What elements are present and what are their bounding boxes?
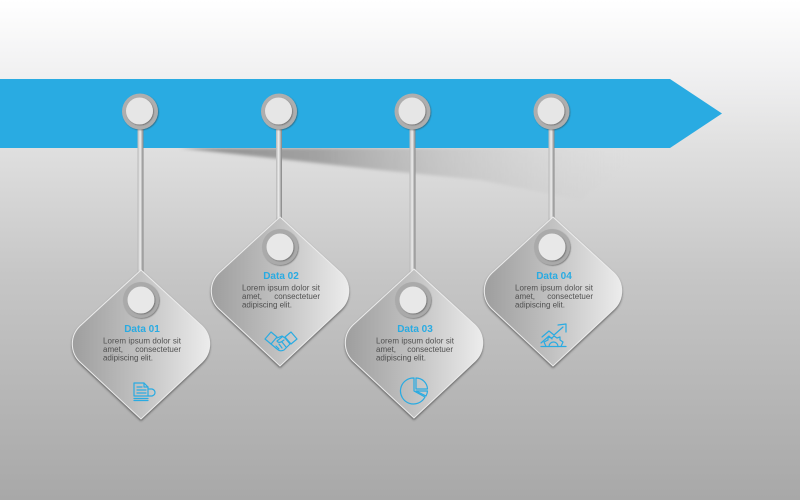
card 4 text	[515, 284, 594, 310]
panel: Data 04	[484, 217, 622, 366]
card 4 text: amet,	[515, 292, 535, 301]
card 2 text: Lorem ipsum dolor sit	[242, 284, 321, 292]
card 2 heading: Data 02	[263, 271, 299, 282]
card 3 ring	[395, 282, 431, 318]
timeline pin 1	[122, 94, 158, 130]
card 4 heading: Data 04	[536, 271, 572, 282]
card 3 text: adipiscing elit.	[376, 354, 426, 362]
icon: handshake	[265, 332, 297, 351]
icon: pie chart	[400, 378, 428, 404]
pole 1	[138, 125, 144, 290]
arrow shadow	[180, 148, 650, 200]
pole 3	[410, 125, 416, 290]
card 1 text: amet,	[103, 345, 123, 354]
card 3 heading: Data 03	[397, 324, 433, 335]
card 1 heading: Data 01	[124, 324, 160, 335]
card 4 text: consectetuer	[547, 292, 593, 301]
card 2 text: consectetuer	[274, 292, 320, 301]
card 1 ring	[123, 282, 159, 318]
card 3 text: Lorem ipsum dolor sit	[376, 336, 455, 346]
panel: Data 03	[345, 269, 483, 418]
timeline pin 2	[261, 94, 297, 130]
card 4 text: adipiscing elit.	[515, 300, 565, 310]
card 3 text: amet,	[376, 345, 396, 354]
card 1 text: consectetuer	[135, 345, 181, 354]
card 2 text: amet,	[242, 292, 262, 301]
icon: growth arrow and gear	[541, 324, 566, 346]
card 2 text: adipiscing elit.	[242, 300, 292, 310]
card 3 text: consectetuer	[407, 345, 453, 354]
card 1 text: adipiscing elit.	[103, 354, 153, 362]
card 3 text	[376, 336, 455, 362]
card 4 ring	[534, 229, 570, 265]
timeline pin 3	[394, 94, 430, 130]
card 4 text: Lorem ipsum dolor sit	[515, 284, 594, 292]
icon: document checklist	[134, 383, 155, 400]
card 2 text	[242, 284, 321, 310]
panel: Data 01	[72, 270, 210, 419]
card 2 ring	[262, 229, 298, 265]
card 1 text: Lorem ipsum dolor sit	[103, 336, 182, 346]
timeline pin 4	[534, 94, 570, 130]
card 1 text	[103, 336, 182, 362]
pole 2	[276, 125, 282, 237]
pole 4	[548, 125, 554, 237]
blue arrow band	[0, 79, 722, 148]
panel: Data 02	[211, 217, 349, 366]
